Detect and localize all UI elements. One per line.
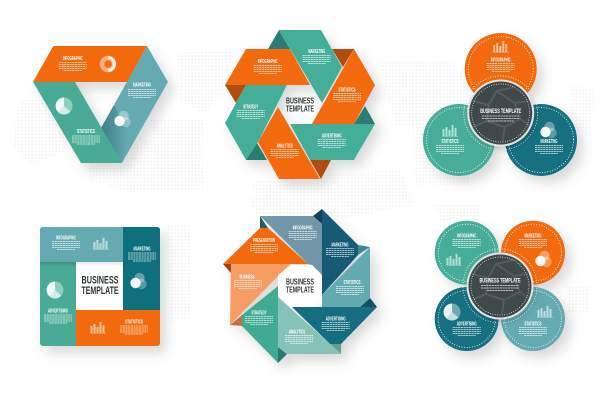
octagon: marketing label: MARKETING: [332, 242, 348, 248]
hexagon: statistics label: [333, 87, 361, 102]
four circles: advertising label: ADVERTISING: [457, 321, 477, 327]
four circles: infographic label: INFOGRAPHIC: [457, 233, 476, 239]
octagon: analytics label: ANALYTICS: [289, 329, 305, 335]
hexagon: infographic label: [254, 59, 282, 74]
three circles: center title: [480, 109, 521, 121]
icon: pie left: [46, 282, 64, 298]
hexagon folds and ribbons: [225, 30, 375, 179]
icon: donut chart: [102, 58, 114, 70]
hexagon: analytics label: [271, 143, 299, 158]
icon: pie chart: [56, 98, 72, 114]
four circles: center disc: [466, 252, 534, 320]
octagon: statistics label: [336, 280, 364, 294]
three circles: marketing label: MARKETING: [540, 139, 558, 145]
icon: pie teal: [444, 304, 460, 320]
icon: venn teal: [540, 122, 557, 138]
three circles: center disc: [467, 80, 534, 146]
octagon: center title: BUSINESS: [286, 276, 314, 286]
diagram: triangle infographic: [33, 46, 168, 163]
icon: bar chart top: [93, 238, 109, 250]
hexagon: infographic label: INFOGRAPHIC: [258, 59, 278, 65]
octagon: advertising label: ADVERTISING: [326, 316, 346, 322]
square: advertising label: ADVERTISING: [48, 308, 68, 314]
square: center title: TEMPLATE: [82, 285, 118, 297]
icon: bar chart green: [442, 125, 458, 137]
icon: bar chart light: [537, 306, 553, 318]
three circles: marketing label: [535, 139, 563, 154]
hexagon: strategy label: STRATEGY: [243, 104, 258, 110]
three circles: infographic label: INFOGRAPHIC: [491, 57, 511, 63]
square: statistics label: STATISTICS: [125, 319, 143, 325]
diagram: square infographic: [40, 227, 160, 346]
octagon: marketing label: [326, 242, 354, 256]
octagon: presentation label: [250, 238, 278, 252]
diagram: hexagon infographic: [225, 30, 375, 179]
icon: venn orange: [535, 251, 552, 267]
octagon: folds and ribbons: [223, 209, 377, 363]
icon: bar chart bottom: [90, 322, 106, 334]
four circles: marketing label: MARKETING: [524, 233, 542, 239]
octagon: advertising label: [322, 316, 350, 330]
hexagon: analytics label: ANALYTICS: [277, 143, 293, 149]
three circles: statistics label: [436, 139, 464, 154]
hexagon: center title: BUSINESS: [286, 95, 314, 105]
triangle ribbons: [33, 46, 168, 163]
four circles: statistics label: STATISTICS: [524, 321, 542, 327]
octagon: analytics label: [285, 329, 313, 344]
octagon: strategy label: [245, 310, 273, 324]
triangle: marketing label: MARKETING: [133, 82, 151, 88]
triangle: infographic label: INFOGRAPHIC: [63, 56, 83, 62]
square: marketing label: MARKETING: [134, 246, 150, 252]
three circles: infographic label: [487, 57, 515, 72]
background: dotted world map: [12, 50, 595, 322]
hexagon: advertising label: [318, 133, 346, 148]
octagon: center title: [286, 276, 314, 294]
diagram: octagon infographic: [223, 209, 377, 363]
octagon: center: [278, 265, 322, 307]
three circles: statistics label: STATISTICS: [442, 139, 459, 145]
square: panels: [40, 227, 160, 346]
four circles: discs: [435, 221, 565, 351]
hexagon: statistics label: STATISTICS: [338, 87, 356, 93]
octagon: strategy label: STRATEGY: [252, 310, 267, 316]
hexagon: center title: TEMPLATE: [286, 103, 314, 113]
hexagon: strategy label: [237, 104, 265, 118]
triangle: statistics label: STATISTICS: [77, 129, 95, 135]
square: center title: [82, 274, 118, 297]
three circles: dotted rings: [426, 36, 574, 172]
four circles: center title: BUSINESS TEMPLATE: [480, 279, 520, 285]
square: infographic label: INFOGRAPHIC: [56, 235, 76, 241]
icon: bar chart green: [446, 254, 462, 266]
three circles: discs: [423, 33, 577, 176]
hexagon: advertising label: ADVERTISING: [322, 133, 342, 139]
icon: bar chart orange: [493, 41, 509, 53]
octagon: presentation label: PRESENTATION: [253, 238, 275, 244]
hexagon: marketing label: [303, 49, 331, 64]
diagram: four circles: [435, 221, 565, 351]
diagram: three circles: [423, 33, 577, 176]
three circles: center title: BUSINESS TEMPLATE: [480, 109, 521, 115]
octagon: infographic label: [289, 225, 317, 240]
icon: venn right: [130, 273, 147, 289]
octagon: center title: TEMPLATE: [286, 284, 314, 294]
hexagon: center title: [286, 95, 314, 113]
octagon: business label: [234, 274, 262, 288]
octagon: business label: BUSINESS: [240, 274, 255, 280]
octagon: infographic label: INFOGRAPHIC: [293, 225, 313, 231]
hexagon: marketing label: MARKETING: [308, 49, 325, 55]
icon: venn: [114, 111, 131, 127]
octagon: statistics label: STATISTICS: [344, 280, 361, 286]
square: center title: BUSINESS: [82, 274, 118, 286]
four circles: dotted rings: [438, 224, 562, 348]
